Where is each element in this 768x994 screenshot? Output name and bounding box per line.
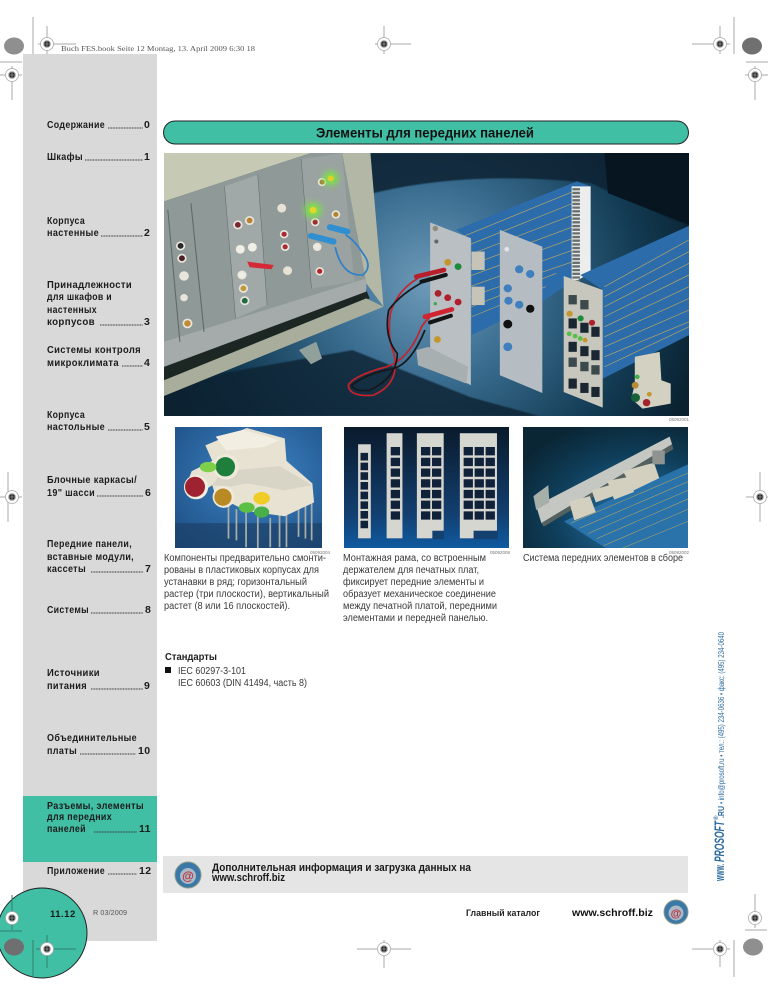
caption 2: элементами и передней панелью. (343, 613, 488, 624)
info bar text (211, 862, 472, 884)
navigation: Источники питания: Источники (47, 667, 100, 679)
footer: website: www.schroff.biz (571, 907, 653, 919)
navigation: Блочные каркасы: 19" шасси (47, 487, 95, 499)
pcb back (456, 181, 591, 335)
photo code: 05092002 (669, 550, 689, 555)
navigation: Корпуса настенные (47, 215, 150, 239)
leds (177, 179, 339, 327)
page number circle (0, 888, 87, 978)
cables (348, 278, 435, 395)
navigation: Источники питания: 9 (144, 680, 150, 692)
navigation: Принадлежности: для шкафов и (47, 291, 112, 303)
caption 1: растер (три плоскости), вертикальный (164, 589, 329, 600)
sidebar highlight: current section (23, 796, 157, 862)
caption 1: Компоненты предварительно смонти- (164, 553, 326, 564)
enclosure (164, 153, 311, 201)
navigation: Принадлежности: настенных (47, 304, 97, 316)
vertical ProSoft contact line (712, 632, 727, 881)
vertical ProSoft contact line: .RU (716, 806, 726, 818)
navigation: Принадлежности (47, 279, 150, 328)
icon: footer logo (664, 900, 688, 924)
navigation: Корпуса настенные: Корпуса (47, 215, 85, 227)
standards block: IEC 60297-3-101 (178, 666, 246, 677)
title banner: Элементы для передних панелей (316, 124, 534, 140)
caption 1: рованы в пластиковых корпусах для (164, 565, 319, 576)
navigation: Объединительные платы: платы (47, 745, 77, 757)
navigation: Передние панели: вставные модули, (47, 551, 134, 563)
vertical ProSoft contact line: PROSOFT (712, 820, 727, 862)
navigation: Системы контроля микроклимата: 4 (144, 357, 150, 369)
vertical ProSoft contact line: WWW. (716, 864, 727, 881)
navigation: Источники питания: питания (47, 680, 87, 692)
icon: footer logo: @ (671, 908, 682, 920)
photo code: 05092008 (490, 550, 510, 555)
navigation: Разъемы: 11 (139, 823, 151, 835)
navigation: Приложение: Приложение (47, 865, 105, 877)
navigation: Корпуса настенные: 2 (144, 227, 150, 239)
navigation: Шкафы: 1 (144, 151, 150, 163)
navigation: Принадлежности: Принадлежности (47, 279, 132, 291)
navigation: Корпуса настольные: 5 (144, 421, 150, 433)
navigation: Корпуса настенные: настенные (47, 227, 99, 239)
navigation: Разъемы: панелей (47, 823, 86, 835)
navigation: Блочные каркасы (47, 474, 151, 499)
navigation: Передние панели: 7 (145, 563, 151, 575)
navigation: Шкафы: Шкафы (47, 151, 83, 163)
navigation: Шкафы (47, 151, 150, 163)
info bar (163, 856, 688, 893)
photo: mounting frames (344, 427, 509, 548)
photo code: 05092004 (310, 550, 330, 555)
standards block: IEC 60603 (DIN 41494, часть 8) (178, 678, 307, 689)
navigation: Системы контроля микроклимата: микроклимата (47, 357, 119, 369)
caption 1: растет (8 или 16 плоскостей). (164, 601, 290, 612)
navigation: Корпуса настольные: настольные (47, 421, 105, 433)
caption 1: устанавки в ряд; горизонтальный (164, 577, 307, 588)
revision label: R 03/2009 (93, 908, 127, 917)
caption 2: между печатной платой, передними (343, 601, 497, 612)
navigation: Приложение (47, 865, 151, 877)
navigation: Блочные каркасы: 6 (145, 487, 151, 499)
icon: info bar logo (175, 862, 201, 888)
navigation: Содержание: 0 (144, 119, 150, 131)
navigation: Системы: Системы (47, 604, 89, 616)
navigation: Принадлежности: корпусов (47, 316, 95, 328)
navigation: Передние панели: кассеты (47, 563, 86, 575)
info bar text: www.schroff.biz (211, 872, 285, 884)
info bar text: Дополнительная информация и загрузка данных на (212, 862, 472, 874)
photo: assembled system (523, 427, 688, 548)
caption 1 (164, 553, 329, 612)
caption 2: фиксирует передние элементы и (343, 576, 484, 588)
navigation: Корпуса настольные: Корпуса (47, 409, 85, 421)
navigation: Передние панели: Передние панели, (47, 538, 132, 550)
navigation: Системы: 8 (145, 604, 151, 616)
page number circle: 11.12 (50, 909, 76, 920)
standards block (165, 651, 307, 689)
main photo: front panel elements (164, 153, 689, 416)
navigation: Принадлежности: 3 (144, 316, 150, 328)
navigation: Объединительные платы (47, 732, 150, 757)
title banner (164, 121, 688, 144)
icon: info bar logo: @ (182, 869, 194, 883)
connector cluster (631, 352, 671, 409)
vertical ProSoft contact line: ® (713, 815, 720, 820)
caption 3: Система передних элементов в сборе (523, 552, 683, 564)
sidebar panel (23, 54, 157, 941)
photo: pre-mounted components (175, 427, 322, 548)
navigation: Источники питания (47, 667, 150, 692)
navigation: Системы (47, 604, 151, 616)
navigation: Блочные каркасы: Блочные каркасы/ (47, 474, 137, 486)
navigation: Системы контроля микроклимата (47, 344, 150, 369)
navigation: Содержание (47, 119, 150, 131)
panels (472, 252, 485, 270)
navigation: Объединительные платы: Объединительные (47, 732, 137, 744)
navigation: Содержание: Содержание (47, 119, 105, 131)
navigation: Приложение: 12 (139, 865, 151, 877)
caption 2: держателем для печатных плат, (343, 565, 479, 576)
navigation: Разъемы: Разъемы, элементы (47, 800, 144, 812)
page header line: Buch FES.book Seite 12 Montag, 13. April 2009 6:30 18 (61, 44, 255, 53)
navigation: Системы контроля микроклимата: Системы контроля (47, 344, 141, 356)
standards block: Стандарты (165, 651, 217, 663)
caption 2: Монтажная рама, со встроенным (343, 553, 486, 564)
footer: catalog label: Главный каталог (466, 908, 540, 919)
caption 2 (343, 553, 497, 624)
photo code: 05092001 (669, 417, 689, 422)
caption 2: образует механическое соединение (343, 588, 496, 600)
navigation: Корпуса настольные (47, 409, 150, 433)
vertical ProSoft contact line: • info@prosoft.ru • тел.: (495) 234-0636 • факс: (495) 234-0640 (716, 632, 726, 804)
navigation: Разъемы (47, 800, 151, 835)
navigation: Передние панели (47, 538, 151, 575)
navigation: Разъемы: для передних (47, 811, 112, 823)
navigation: Объединительные платы: 10 (138, 745, 150, 757)
